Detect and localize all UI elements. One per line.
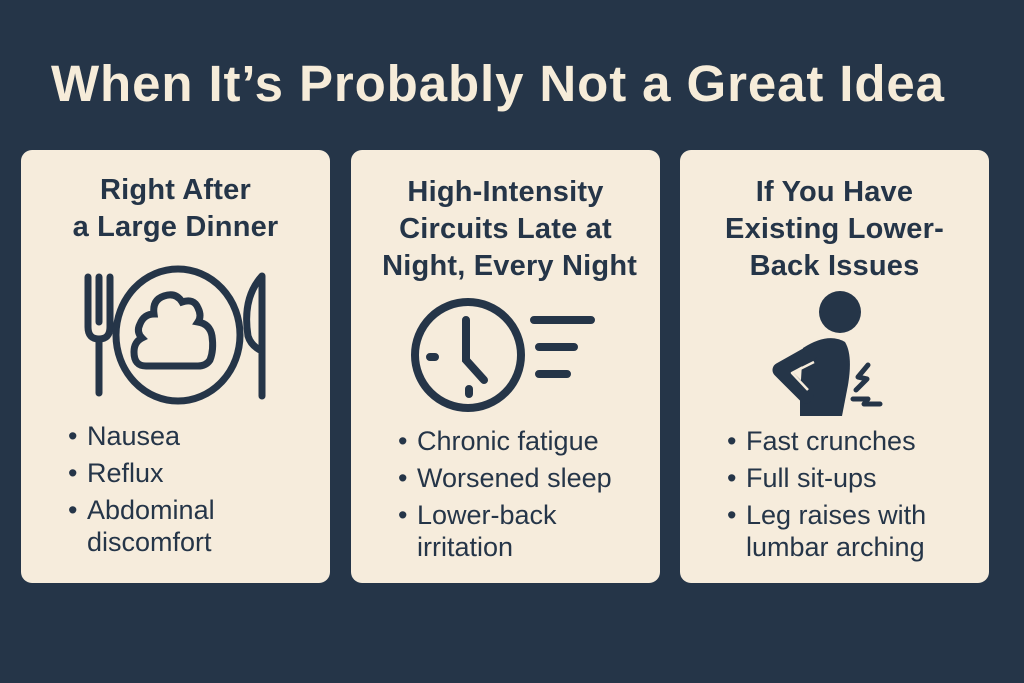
bullet list: lumbar arching: [746, 532, 925, 562]
bullet list: [728, 426, 926, 562]
heading: Back Issues: [750, 250, 919, 282]
bullet list: Worsened sleep: [417, 463, 612, 493]
bullet list: Leg raises with: [746, 500, 926, 530]
heading: Night, Every Night: [382, 250, 637, 282]
panel: after large dinner: [21, 150, 330, 583]
heading: High-Intensity: [407, 176, 604, 208]
heading: [382, 176, 637, 282]
icon: plate with fork and knife: [84, 266, 266, 404]
icon: person with back pain: [772, 291, 882, 416]
bullet list: Nausea: [87, 421, 180, 451]
heading: [73, 174, 278, 243]
bullet list: Chronic fatigue: [417, 426, 599, 456]
icon: clock with speed lines: [411, 298, 595, 412]
bullet list: discomfort: [87, 527, 212, 557]
panel: late night circuits: [351, 150, 660, 583]
bullet list: [399, 426, 612, 562]
heading: Right After: [100, 174, 251, 206]
title: When It’s Probably Not a Great Idea: [51, 55, 945, 112]
bullet list: Full sit-ups: [746, 463, 877, 493]
heading: Existing Lower-: [725, 213, 944, 245]
bullet list: Reflux: [87, 458, 164, 488]
bullet list: irritation: [417, 532, 513, 562]
bullet list: Lower-back: [417, 500, 557, 530]
bullet list: Fast crunches: [746, 426, 916, 456]
bullet list: Abdominal: [87, 495, 215, 525]
heading: Circuits Late at: [399, 213, 612, 245]
bullet list: [69, 421, 215, 557]
heading: a Large Dinner: [73, 211, 278, 243]
panel: lower back issues: [680, 150, 989, 583]
heading: [725, 176, 944, 282]
heading: If You Have: [756, 176, 913, 208]
